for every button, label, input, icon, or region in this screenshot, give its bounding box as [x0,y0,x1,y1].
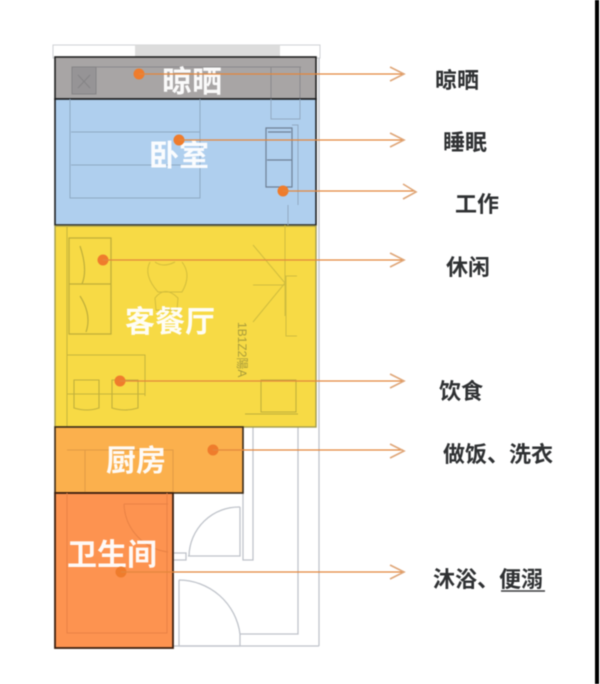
vertical floor plan annotation: 1B1Z2陽A [235,322,249,377]
connector: dining table to eating [114,374,404,388]
label: leisure: 休闲 [446,255,490,280]
label: cooking and laundry: 做饭、洗衣 [443,442,553,467]
floor plan: outline and doors [53,45,320,646]
room: bathroom [55,493,173,648]
right edge bar [595,0,599,684]
room label: bathroom: 卫生间 [67,539,157,572]
connector: sofa to leisure [98,253,404,267]
connector: balcony to drying [134,67,404,81]
connector: desk to working [278,184,416,199]
label: drying: 晾晒 [435,68,479,93]
label: working: 工作 [455,192,499,217]
room label: bedroom: 卧室 [149,140,209,173]
room: living and dining [55,225,316,427]
label: bathing and toilet: 沐浴、便溺 [433,567,543,592]
label: eating: 饮食 [439,379,483,404]
label: sleeping: 睡眠 [443,130,487,155]
room: balcony [55,57,316,119]
room: kitchen [55,427,243,493]
room label: living and dining: 客餐厅 [125,306,215,339]
room label: kitchen: 厨房 [106,445,166,478]
room label: balcony: 晾晒 [162,66,222,99]
connector: bathroom to bathing and toilet [116,565,404,579]
connector: kitchen to cooking and laundry [208,444,404,458]
room: bedroom [55,99,316,225]
connector: bedroom to sleeping [174,133,404,147]
